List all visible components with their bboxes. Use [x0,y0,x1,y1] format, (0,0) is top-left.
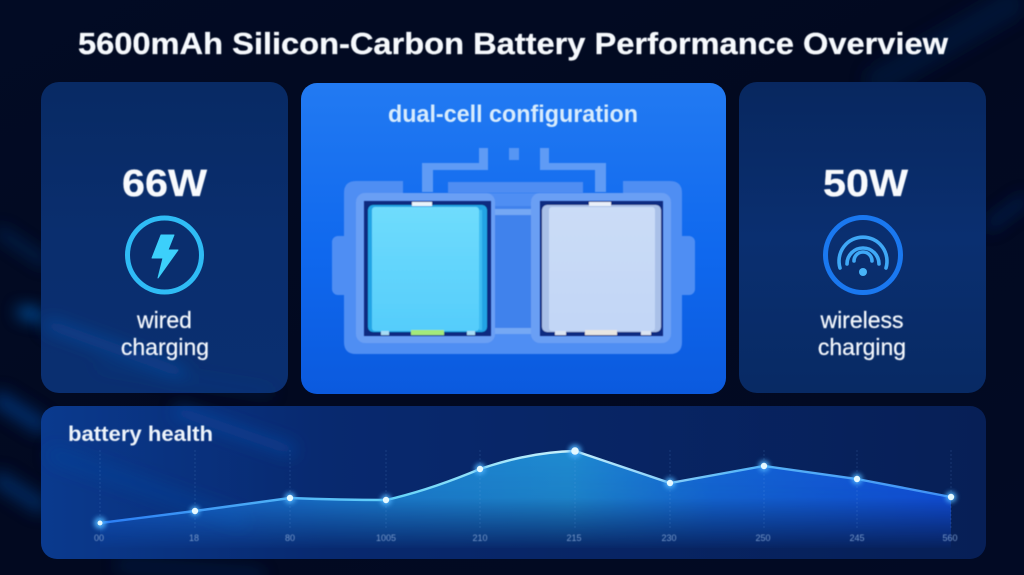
battery cell: cyan [364,201,491,336]
x-axis labels: 250 [755,533,771,543]
x-axis labels: 210 [472,533,488,543]
icon: lightning bolt in ring [128,218,202,292]
panel: dual-cell configuration [301,83,726,394]
circuit traces [422,148,606,193]
x-axis labels: 80 [285,533,295,543]
battery health heading: battery health [68,423,213,446]
area chart [94,444,958,548]
wireless charging label line two: charging [818,334,906,360]
wired charging label line two: charging [121,334,209,360]
x-axis labels: 230 [661,533,677,543]
panel: battery health [41,406,986,559]
wireless charging label: wireless [819,307,904,333]
x-axis labels: 245 [849,533,865,543]
wireless charging value: 50W [823,163,908,205]
x-axis labels: 18 [189,533,199,543]
wired charging label: wired [136,307,192,333]
wired charging value: 66W [122,163,207,205]
data points [94,444,956,529]
title: 5600mAh Silicon-Carbon Battery Performance Overview [78,26,949,61]
icon: wireless waves in ring [826,218,900,292]
x-axis labels: 215 [566,533,582,543]
x-axis labels [94,533,958,543]
battery cell: silver [540,201,663,336]
x-axis labels: 1005 [376,533,396,543]
x-axis labels: 560 [942,533,958,543]
x-axis labels: 00 [94,533,104,543]
panel: wired charging [41,82,288,393]
panel: wireless charging [739,82,986,393]
dual-cell heading: dual-cell configuration [388,101,638,128]
battery tray [332,181,695,354]
